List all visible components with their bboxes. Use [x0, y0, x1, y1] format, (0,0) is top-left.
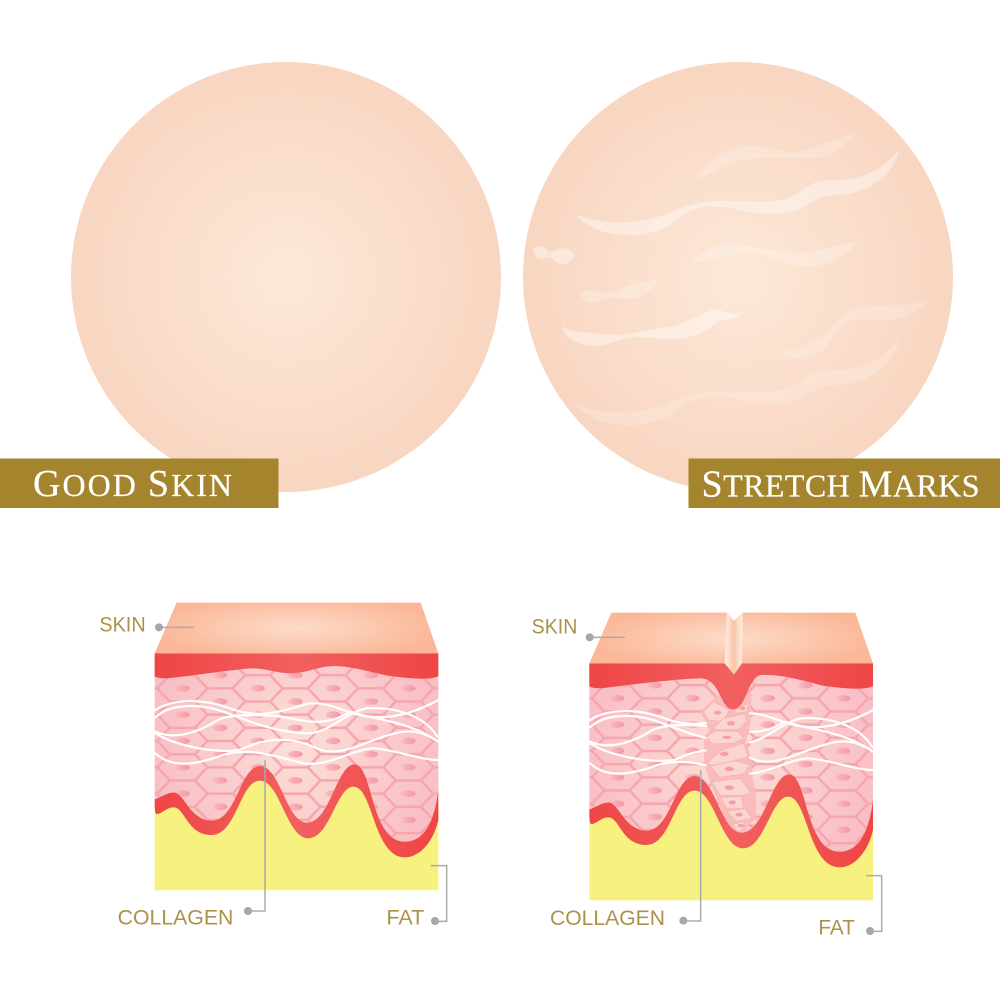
damaged scar cells	[701, 693, 761, 834]
epidermis top surface	[589, 613, 873, 663]
label: skin: SKIN	[532, 613, 577, 638]
lower red layer	[155, 764, 438, 857]
dermis with hexagonal cells	[155, 657, 438, 842]
fat layer	[589, 787, 873, 900]
diagram: good skin cross-section	[99, 603, 447, 929]
collagen fibres	[155, 700, 438, 764]
stretch mark streaks	[533, 135, 927, 425]
label: fat	[818, 876, 882, 939]
lower red layer	[589, 774, 873, 867]
dermis with hexagonal cells	[589, 667, 873, 852]
crack in skin	[725, 613, 743, 675]
epidermis top surface	[155, 603, 438, 653]
banner: good skin	[0, 458, 278, 508]
label: skin: SKIN	[99, 612, 146, 637]
banner: stretch marks	[688, 458, 1000, 508]
label: fat	[386, 866, 447, 929]
circle: stretch marks skin	[523, 62, 953, 492]
label: skin	[99, 612, 194, 637]
upper red layer	[155, 653, 438, 679]
heading: good skin: GOOD SKIN	[33, 463, 232, 505]
diagram: stretch-marked skin cross-section	[532, 613, 882, 939]
heading: stretch marks: STRETCH MARKS	[702, 464, 980, 506]
label: fat: FAT	[818, 914, 855, 939]
fat layer	[155, 777, 438, 890]
label: collagen	[550, 770, 701, 930]
label: collagen: COLLAGEN	[118, 904, 233, 929]
broken collagen fibres	[590, 710, 873, 774]
circle: good skin	[71, 62, 501, 492]
label: skin	[532, 613, 625, 641]
label: collagen: COLLAGEN	[550, 905, 665, 930]
label: collagen	[118, 760, 265, 929]
label: fat: FAT	[386, 904, 424, 929]
upper red layer with dip	[589, 663, 873, 709]
